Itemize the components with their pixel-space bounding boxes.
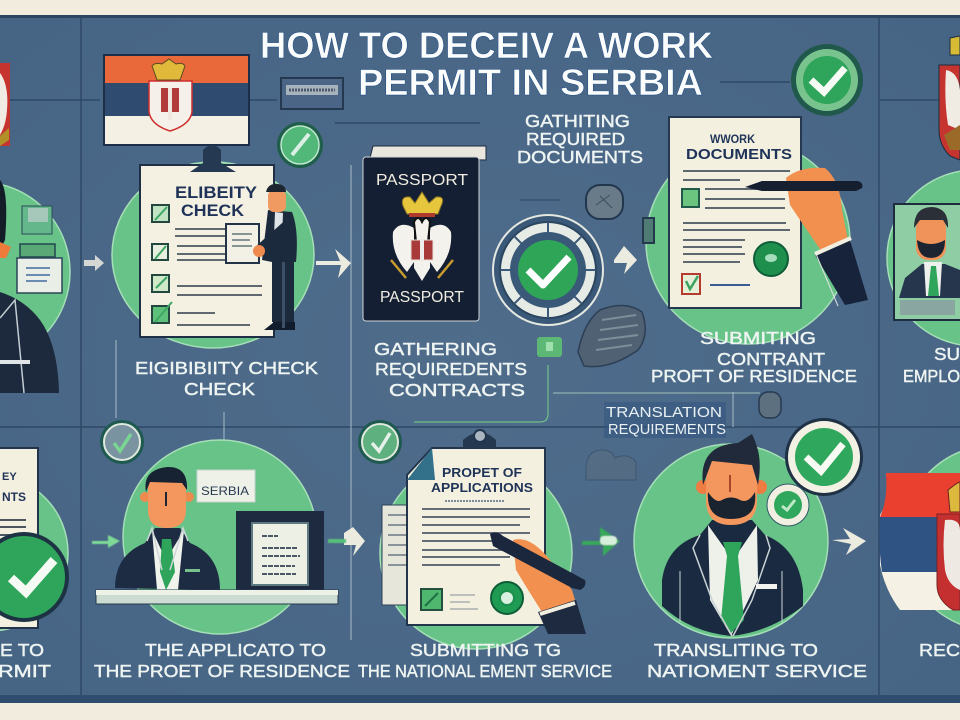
monitor	[236, 511, 324, 590]
figure: left bottom document: EY	[2, 471, 17, 483]
figure: hand with pen lower	[490, 532, 586, 634]
label: eligibility check	[135, 358, 318, 399]
figure: left person with scanner	[0, 180, 62, 393]
stamp	[578, 305, 645, 367]
label: receive edge: REC	[919, 640, 960, 660]
green circles behind illustrations	[0, 140, 960, 649]
icon: check top bottom row 2	[358, 420, 402, 464]
label: gathering requirements contracts	[374, 339, 527, 400]
icon: small check right of man	[767, 484, 809, 526]
section label: gathering required documents: REQUIRED	[526, 129, 625, 149]
label: submitting to national service	[358, 640, 612, 681]
figure: hand with pen	[745, 168, 868, 306]
label: submitting to national service: SUBMITTING TG	[410, 640, 561, 660]
label: submitting contract: SUBMITING	[700, 328, 816, 348]
label: submitting contract: CONTRANT	[717, 349, 825, 369]
panel: passport: PASSPORT	[376, 172, 469, 189]
desk	[96, 590, 338, 604]
section label: gathering required documents: DOCUMENTS	[517, 147, 643, 167]
label: employment edge: SU	[934, 344, 960, 364]
coat of arms	[391, 192, 453, 281]
panel: passport: PASSPORT	[380, 289, 465, 306]
icon: large check left bottom	[0, 532, 69, 622]
clip	[190, 145, 236, 172]
label: gathering requirements contracts: GATHERING	[374, 339, 497, 359]
icon: seal small	[586, 185, 623, 219]
panel: proof of applications document: PROPET OF	[442, 466, 522, 480]
panel: proof of applications document: APPLICATIONS	[431, 481, 533, 495]
panel: applicant at desk	[96, 467, 338, 604]
label: translating to national service: TRANSLITING TO	[654, 640, 818, 660]
small label plate	[281, 78, 343, 109]
figure: left bottom document: NTS	[2, 490, 26, 504]
label: eligibility check: EIGIBIBIITY CHECK	[135, 358, 318, 378]
label: translating to national service	[647, 640, 867, 681]
label: submitting contract: PROFT OF RESIDENCE	[651, 366, 857, 386]
panel: eligibility check clipboard	[140, 145, 274, 337]
label: left bottom: E TO	[0, 640, 44, 660]
figure: left bottom document	[0, 448, 38, 628]
sign	[197, 470, 255, 502]
title: PERMIT IN SERBIA	[358, 62, 703, 103]
icon: big check right of man	[785, 418, 863, 496]
scanner icon	[22, 206, 52, 234]
label: submitting contract	[651, 328, 857, 386]
flag: Serbia top	[103, 54, 250, 146]
panel: passport	[363, 146, 486, 321]
green glowing arrows	[92, 527, 620, 556]
panel: work documents: DOCUMENTS	[686, 146, 792, 163]
panel: eligibility check clipboard: CHECK	[181, 201, 245, 220]
figure: right portrait frame	[894, 204, 960, 320]
icon: big check top right	[791, 44, 863, 116]
label: translating to national service: NATIOMENT SERVICE	[647, 661, 867, 681]
label: translation requirements	[604, 402, 726, 438]
title	[260, 25, 713, 103]
section label: gathering required documents	[517, 111, 643, 167]
icon: check top bottom row 1	[100, 420, 144, 464]
arrows	[84, 246, 866, 556]
label: translation requirements: REQUIREMENTS	[608, 422, 726, 438]
label: the applicant: THE PROET OF RESIDENCE	[94, 661, 350, 681]
icon: check badge small top	[277, 122, 323, 168]
label: eligibility check: CHECK	[184, 379, 255, 399]
section label: gathering required documents: GATHITING	[525, 111, 630, 131]
panel: work documents: WWORK	[710, 132, 755, 146]
label: gathering requirements contracts: CONTRACTS	[389, 380, 525, 400]
applicant	[115, 528, 220, 590]
document heading: ELIBEITY	[175, 183, 258, 202]
label: the applicant: THE APPLICATO TO	[145, 640, 326, 660]
faded stamp	[586, 450, 636, 480]
panel: applicant at desk: SERBIA	[201, 486, 249, 498]
flag: Serbia bottom right	[879, 473, 960, 610]
icon: large check dial	[493, 215, 603, 325]
label: the applicant	[94, 640, 350, 681]
small seal near translation	[759, 392, 781, 418]
flag crest left edge	[0, 63, 10, 146]
label: translation requirements: TRANSLATION	[606, 405, 722, 421]
connector square	[537, 337, 562, 357]
label: left bottom	[0, 640, 51, 681]
icon: badge on form	[643, 218, 654, 243]
panel: work documents	[669, 117, 801, 308]
label: gathering requirements contracts: REQUIREDENTS	[375, 359, 527, 379]
label: employment edge	[903, 344, 960, 386]
figure: bearded man in suit	[662, 434, 803, 636]
panel: proof of applications document	[382, 430, 545, 625]
title: HOW TO DECEIV A WORK	[260, 25, 713, 66]
label: submitting to national service: THE NATIONAL EMENT SERVICE	[358, 661, 612, 681]
flag crest right edge	[939, 36, 960, 160]
figure: clerk with paper	[226, 184, 297, 330]
